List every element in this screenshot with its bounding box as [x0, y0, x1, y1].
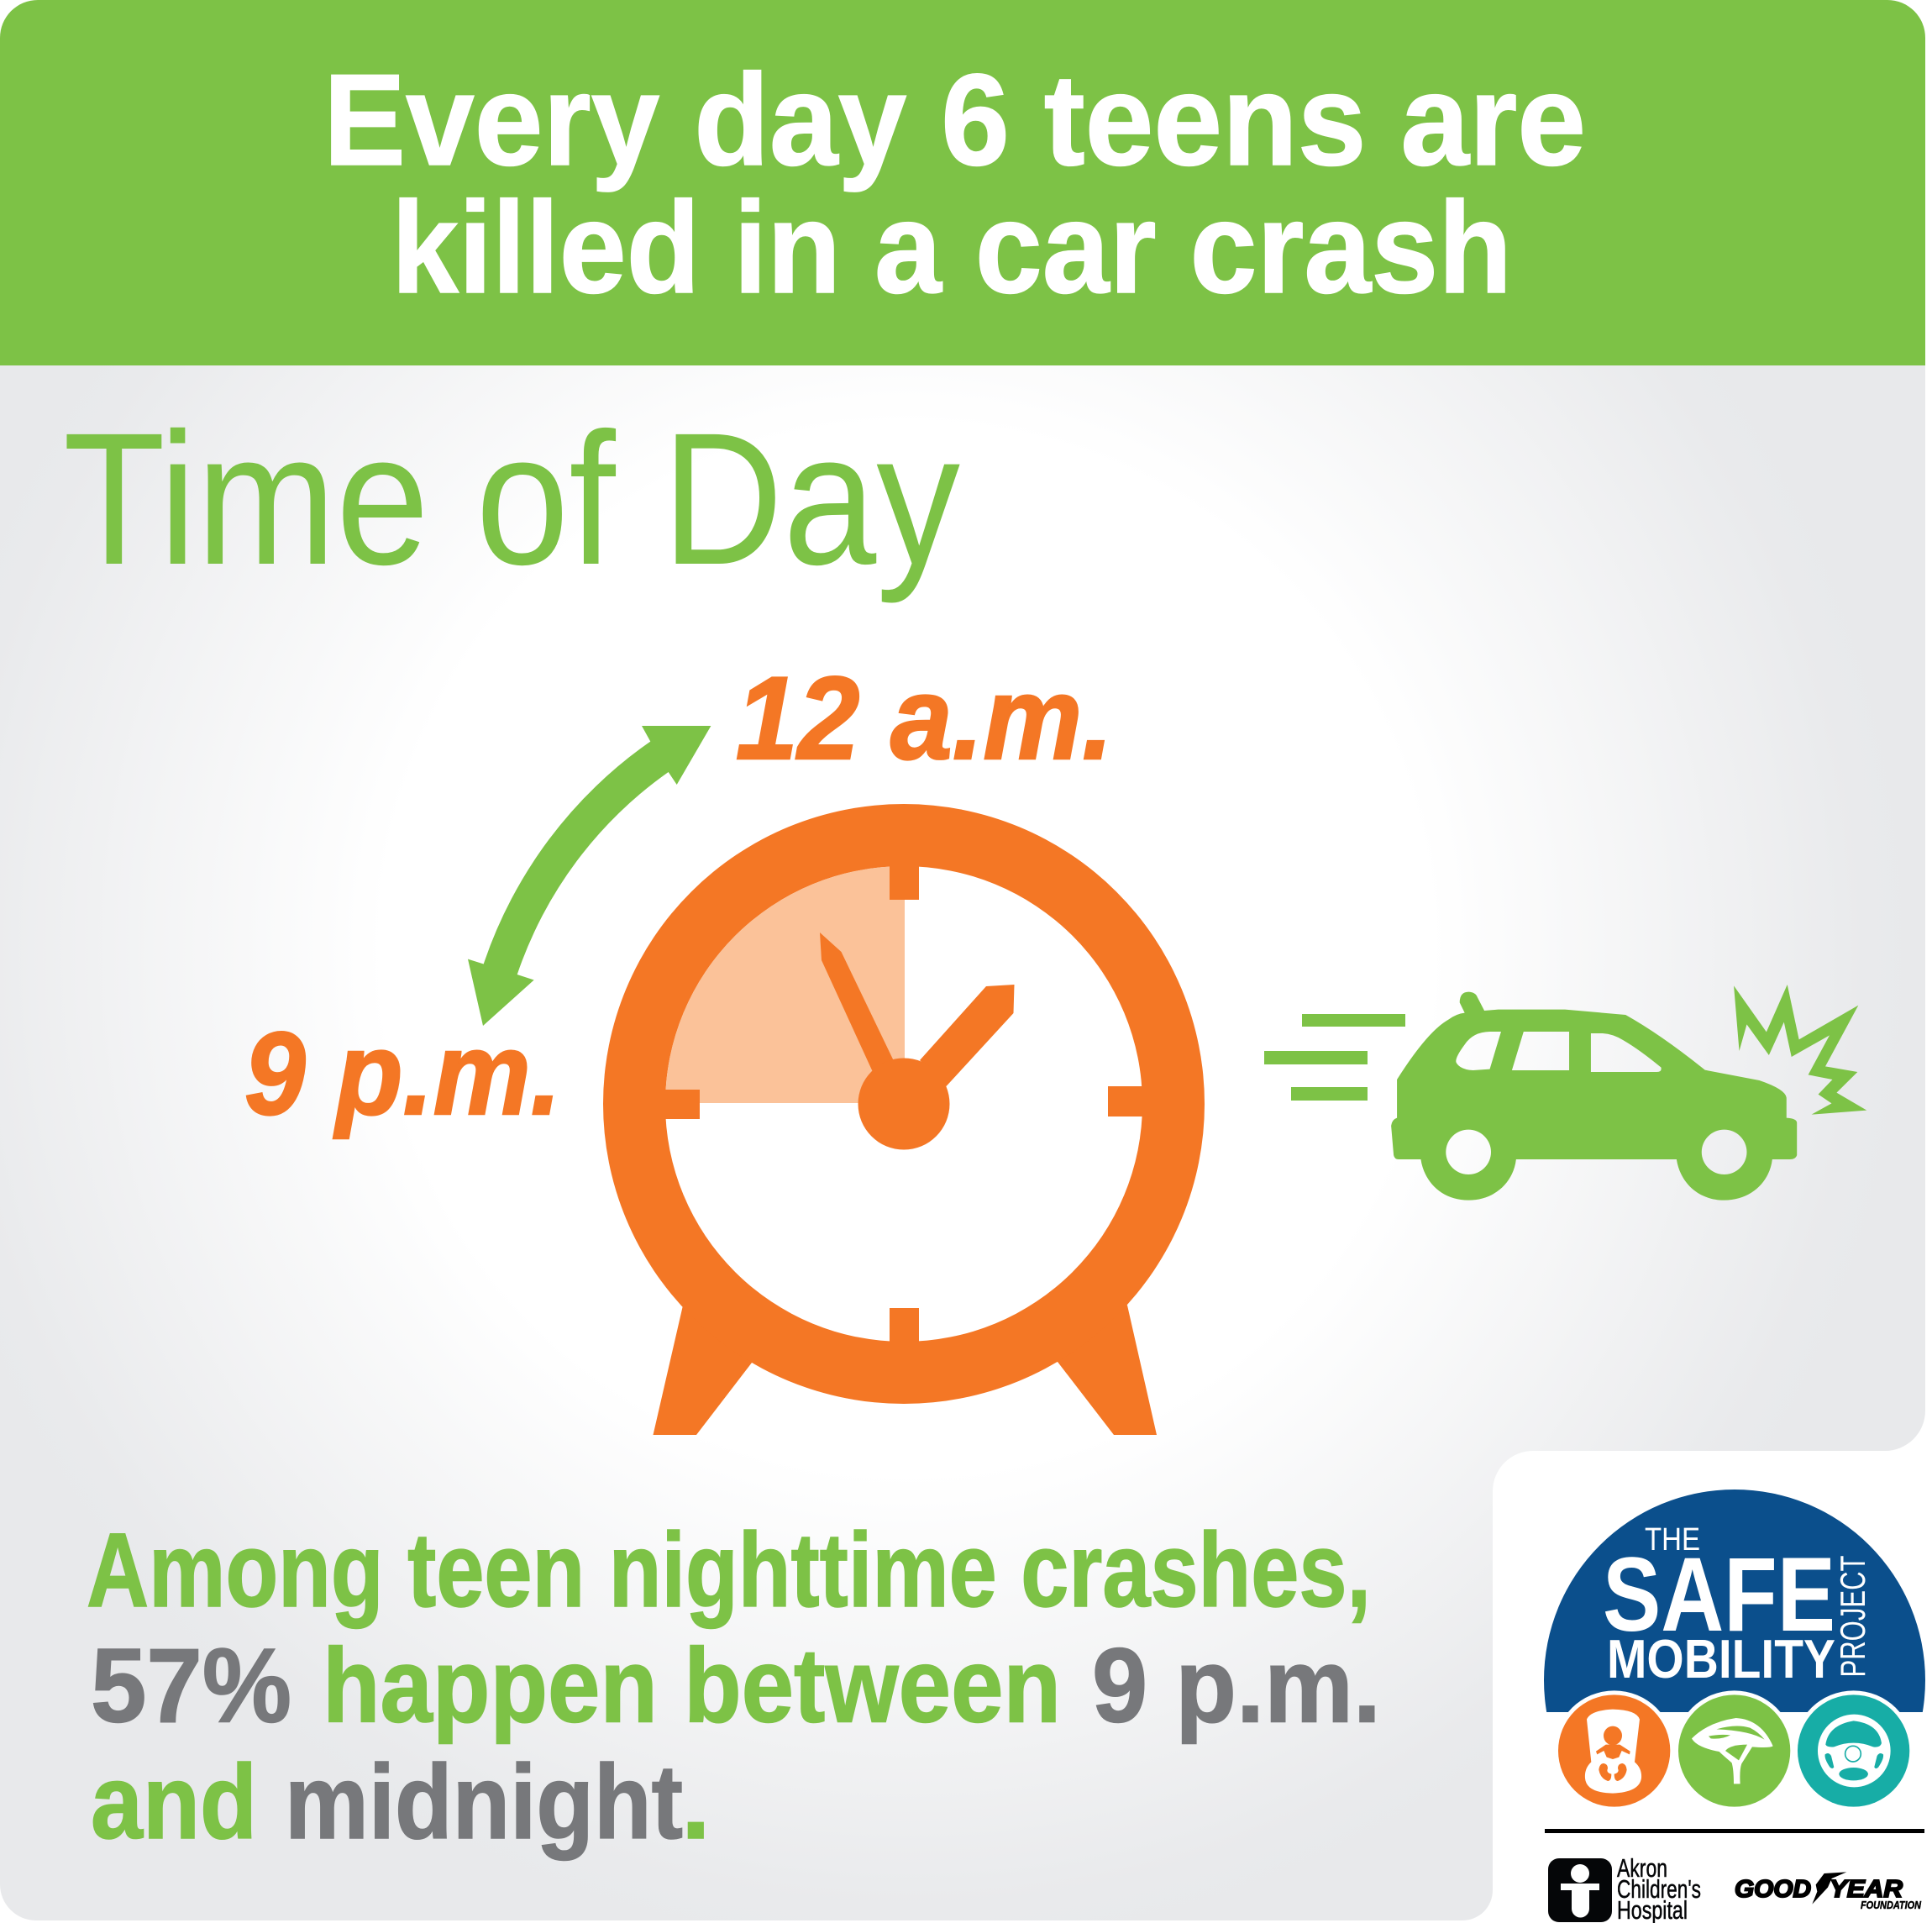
logo: The Safe Mobility Project	[1544, 1490, 1925, 1807]
text block: nighttime crash statistic: 9 p.m.	[1092, 1628, 1381, 1745]
text block: nighttime crash statistic: 57%	[91, 1628, 291, 1745]
logo wordmark	[1603, 1522, 1872, 1689]
header background	[0, 0, 1925, 365]
panel: green header banner	[0, 0, 1925, 365]
text block: nighttime crash statistic: and	[91, 1744, 257, 1861]
text block: nighttime crash statistic: midnight	[285, 1744, 683, 1861]
logo icon circles	[1554, 1690, 1914, 1811]
title: Every day 6 teens are	[323, 47, 1586, 192]
logo: Akron Children's Hospital	[1548, 1853, 1701, 1923]
text block: nighttime crash statistic: happen between	[323, 1628, 1061, 1745]
Akron wordmark: Children's	[1617, 1874, 1701, 1904]
text block: nighttime crash statistic: Among teen nighttime crashes,	[87, 1512, 1371, 1629]
speed lines	[1264, 1014, 1405, 1101]
logo wordmark: THE	[1645, 1522, 1700, 1558]
divider: black rule	[1545, 1829, 1924, 1833]
clock hands	[820, 933, 1015, 1149]
clock face	[665, 866, 1142, 1342]
logo wordmark: PROJECT	[1833, 1556, 1872, 1677]
icon: child car seat	[1554, 1690, 1674, 1811]
Goodyear wordmark: YEAR	[1830, 1876, 1903, 1903]
icon: speeding car crash	[1264, 985, 1866, 1201]
title: killed in a car crash	[391, 175, 1512, 320]
crash burst	[1734, 985, 1866, 1115]
Goodyear wordmark	[1735, 1876, 1922, 1911]
label: 12 a.m.: 12 a.m.	[736, 652, 1113, 784]
Goodyear wordmark: GOOD	[1735, 1876, 1811, 1903]
icon: winged foot	[1812, 1872, 1846, 1905]
logo blue semicircle	[1544, 1490, 1925, 1712]
icon: bike helmet	[1674, 1690, 1794, 1811]
hour ticks	[664, 864, 1144, 1344]
text block: nighttime crash statistic	[87, 1512, 1381, 1861]
logo: Goodyear Foundation	[1735, 1872, 1922, 1911]
title	[323, 47, 1586, 320]
Akron wordmark	[1617, 1853, 1701, 1923]
clock legs	[654, 1176, 1157, 1435]
label: 9 p.m.: 9 p.m.	[244, 1007, 561, 1139]
Goodyear wordmark: FOUNDATION	[1861, 1899, 1922, 1911]
icon: orange clock	[603, 804, 1205, 1435]
heading: Time of Day: Time of Day	[63, 394, 960, 604]
icon: steering wheel	[1793, 1690, 1914, 1811]
arrow: double-headed curved green arrow	[468, 726, 711, 1026]
icon: Akron child figure	[1548, 1858, 1612, 1922]
text block: nighttime crash statistic: .	[681, 1744, 711, 1861]
logo wordmark: SAFE	[1603, 1537, 1835, 1653]
clock hub	[858, 1059, 949, 1149]
Akron wordmark: Akron	[1617, 1853, 1667, 1883]
clock ring	[603, 804, 1205, 1404]
highlighted 9 to 12 wedge	[665, 866, 905, 1103]
car silhouette	[1391, 992, 1797, 1201]
logo wordmark: MOBILITY	[1607, 1628, 1835, 1689]
